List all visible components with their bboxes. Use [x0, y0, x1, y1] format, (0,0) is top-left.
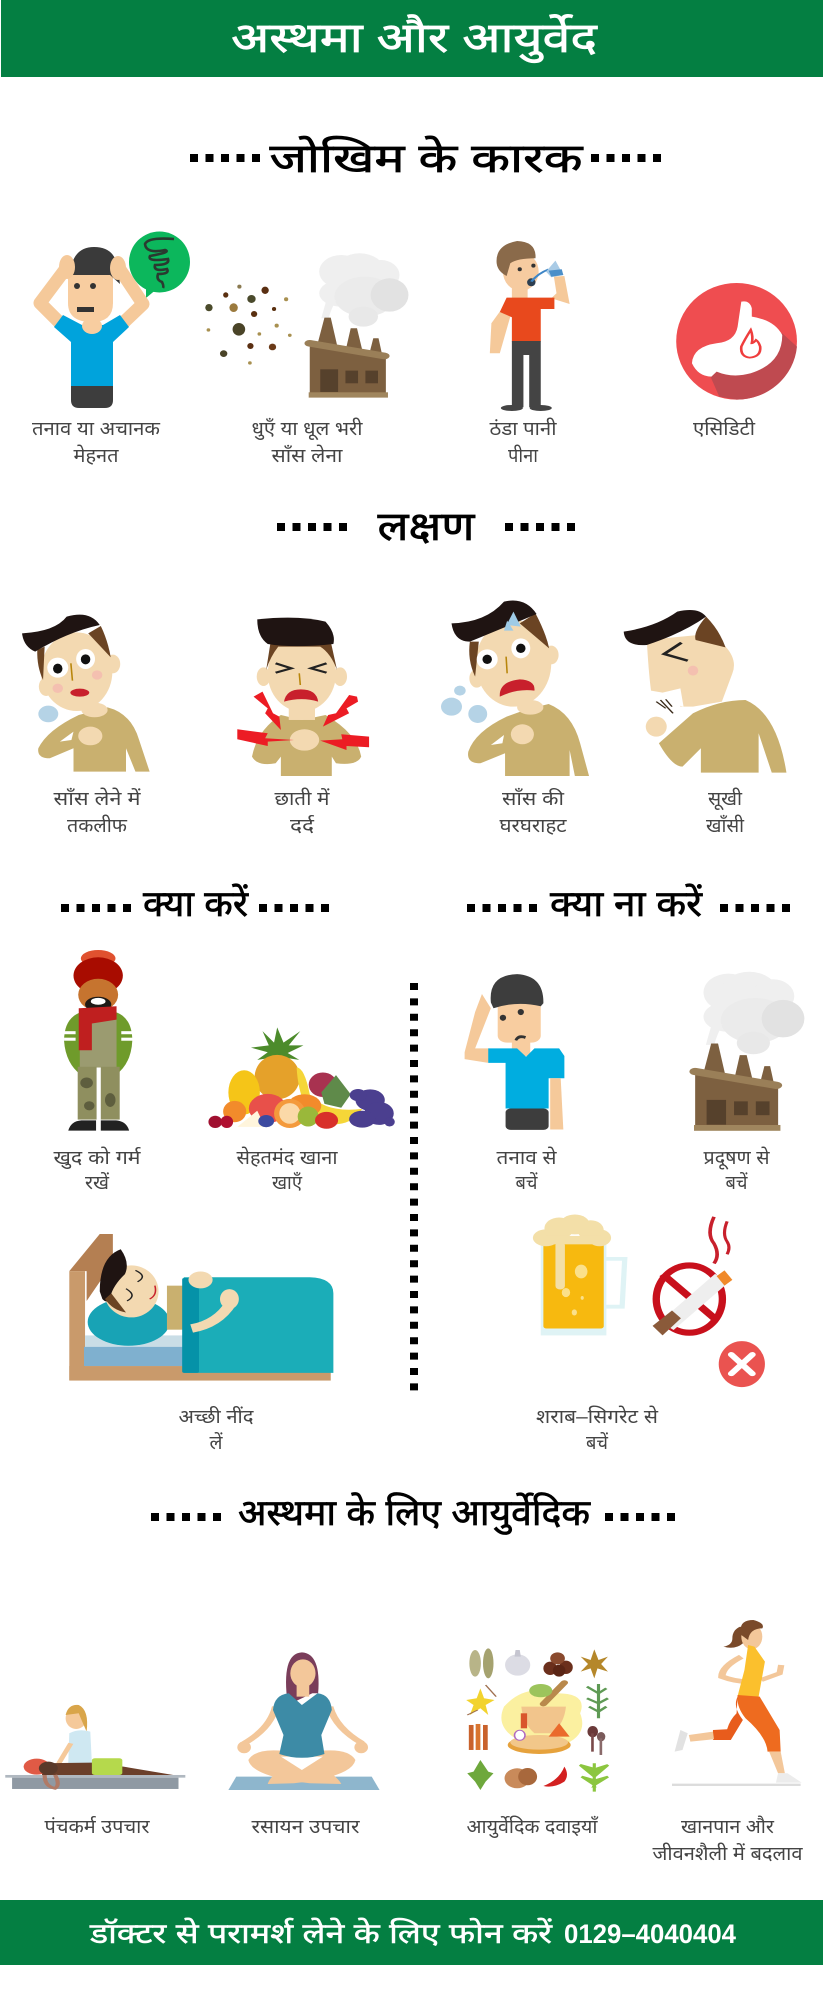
divider: dotted vertical line [410, 983, 418, 1391]
heading: what not to do: क्या ना करें [550, 883, 703, 924]
heading: symptoms [277, 505, 575, 549]
label: avoid stress: बचें [516, 1171, 538, 1194]
title banner [1, 0, 823, 77]
label: smoke and dust: साँस लेना [272, 444, 344, 467]
label: avoid stress [496, 1146, 558, 1194]
icon: man in warm clothes [64, 950, 133, 1131]
label: wheezing [500, 787, 567, 837]
label: keep warm: रखें [85, 1171, 109, 1194]
icon: man drinking cold water [490, 241, 570, 411]
heading: what to do: क्या करें [143, 883, 249, 924]
label: healthy food [236, 1146, 339, 1194]
label: cold water: पीना [508, 445, 539, 467]
icon: man coughing [624, 610, 786, 773]
label: stress: तनाव या अचानक [32, 419, 160, 440]
heading: risk factors: जोखिम के कारक [270, 136, 584, 181]
panel: risk factors [32, 136, 797, 467]
label: keep warm: खुद को गर्म [54, 1146, 142, 1170]
label: good sleep [178, 1405, 254, 1454]
icon: ayurvedic herbs and spices [466, 1648, 608, 1792]
heading: ayurvedic treatment: अस्थमा के लिए आयुर्वेदिक [238, 1492, 591, 1535]
label: wheezing: घरघराहट [500, 816, 567, 837]
label: diet and lifestyle change: जीवनशैली में बदलाव [652, 1842, 803, 1865]
icon: fruit pile [208, 1027, 395, 1129]
label: breathing difficulty [54, 787, 141, 837]
label: avoid alcohol and cigarettes [536, 1405, 659, 1454]
heading: what not to do [467, 883, 790, 924]
panel: what not to do [465, 883, 804, 1454]
icon: polluting factory [694, 972, 804, 1131]
label: smoke and dust: धुएँ या धूल भरी [252, 417, 364, 441]
label: wheezing: साँस की [502, 787, 565, 810]
label: avoid stress: तनाव से [496, 1146, 558, 1169]
label: smoke and dust [252, 417, 364, 467]
icon: meditating woman [228, 1652, 380, 1790]
title: अस्थमा और आयुर्वेद [231, 14, 598, 63]
panel: symptoms [22, 505, 786, 837]
label: ayurvedic medicines: आयुर्वेदिक दवाइयाँ [466, 1815, 599, 1839]
label: avoid pollution: बचें [726, 1171, 748, 1194]
panel: what to do [54, 883, 395, 1454]
icon: stressed man touching head [465, 974, 564, 1130]
label: dry cough [706, 788, 745, 837]
panel: ayurvedic treatment [5, 1492, 803, 1865]
label: stress: मेहनत [74, 444, 120, 467]
heading: what to do [61, 883, 329, 924]
label: diet and lifestyle change [652, 1816, 803, 1865]
icon: panchakarma massage [5, 1705, 185, 1789]
icon: man wheezing [441, 601, 589, 776]
label: avoid pollution [704, 1146, 771, 1194]
icon: stressed man with speech bubble [40, 232, 190, 408]
footer text: डॉक्टर से परामर्श लेने के लिए फोन करें [89, 1917, 553, 1949]
label: avoid pollution: प्रदूषण से [704, 1146, 771, 1170]
icon: beer mug [533, 1214, 625, 1335]
label: breathing difficulty: तकलीफ [67, 815, 127, 837]
label: rasayana: रसायन उपचार [252, 1817, 361, 1838]
icon: no smoking [653, 1217, 732, 1336]
label: chest pain: दर्द [290, 814, 315, 837]
label: dry cough: खाँसी [706, 814, 745, 837]
label: chest pain: छाती में [274, 787, 330, 810]
footer call-to-action banner [0, 1900, 823, 1965]
label: cold water [490, 418, 558, 467]
heading: symptoms: लक्षण [378, 505, 476, 549]
heading: ayurvedic treatment [151, 1492, 675, 1535]
label: avoid alcohol and cigarettes: बचें [586, 1431, 609, 1454]
label: diet and lifestyle change: खानपान और [681, 1816, 775, 1838]
label: acidity: एसिडिटी [693, 418, 756, 440]
heading: risk factors [190, 136, 661, 181]
label: dry cough: सूखी [708, 788, 743, 811]
label: healthy food: सेहतमंद खाना [236, 1146, 339, 1169]
label: cold water: ठंडा पानी [490, 418, 558, 440]
label: stress [32, 419, 160, 467]
icon: running woman [672, 1620, 802, 1786]
label: good sleep: अच्छी नींद [178, 1405, 254, 1428]
icon: stomach acidity [676, 283, 797, 400]
label: chest pain [274, 787, 330, 837]
label: panchakarma: पंचकर्म उपचार [44, 1815, 151, 1838]
label: healthy food: खाएँ [272, 1171, 302, 1194]
icon: man with chest pain [237, 618, 369, 776]
icon: cross mark [719, 1341, 765, 1387]
label: breathing difficulty: साँस लेने में [54, 787, 141, 810]
icon: man short of breath [22, 615, 150, 772]
label: avoid alcohol and cigarettes: शराब–सिगरेट से [536, 1405, 659, 1428]
label: keep warm [54, 1146, 142, 1194]
label: good sleep: लें [210, 1431, 224, 1454]
phone number: 0129–4040404 [564, 1919, 736, 1949]
icon: sleeping person in bed [69, 1234, 333, 1381]
icon: dust and factory smoke [205, 253, 408, 398]
